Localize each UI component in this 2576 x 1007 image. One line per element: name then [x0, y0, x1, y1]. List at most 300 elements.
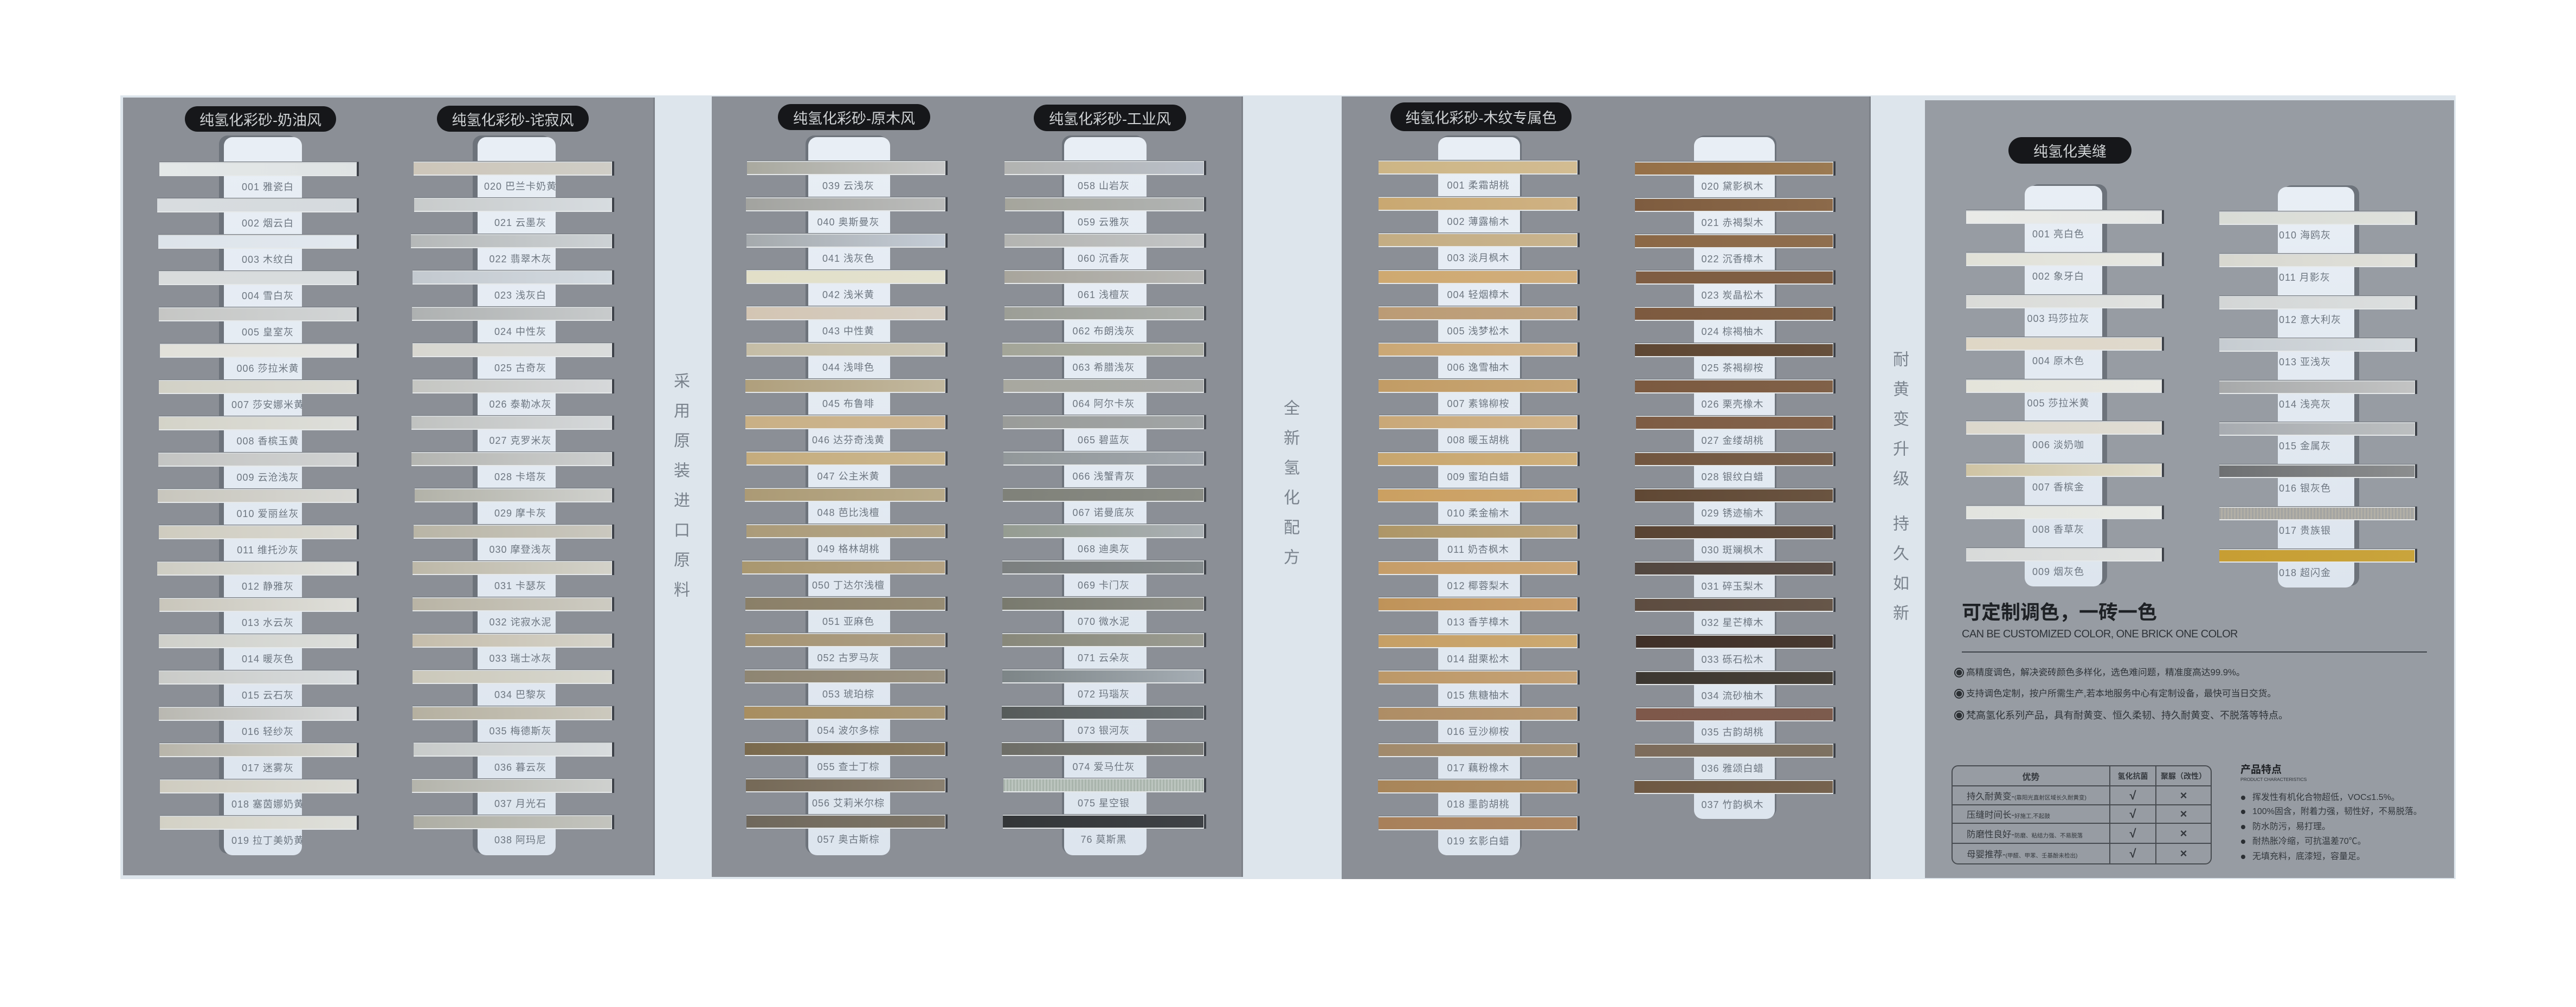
swatch 048 [742, 488, 948, 524]
swatch 067 [1002, 488, 1206, 524]
heading: 纯氢化美缝: 纯氢化美缝 [2033, 144, 2107, 160]
swatch 005 [159, 307, 359, 338]
swatch 076: 76 莫斯黑 [1080, 834, 1127, 845]
swatch 041: 041 浅灰色 [822, 253, 874, 264]
swatch 017 [2219, 507, 2417, 543]
swatch 022: 022 沉香樟木 [1701, 254, 1764, 264]
swatch 069 [1002, 560, 1206, 597]
swatch 019 [1378, 816, 1580, 853]
heading: 奶油风: 纯氢化彩砂-奶油风 [199, 112, 321, 128]
swatch 008: 008 香槟玉黄 [236, 436, 299, 447]
swatch 014: 014 暖灰色 [242, 654, 294, 664]
swatch 043: 043 中性黄 [822, 326, 874, 337]
heading: 诧寂风: 纯氢化彩砂-诧寂风 [452, 112, 574, 128]
swatch 018 [2219, 549, 2417, 585]
side text: 采用原装进口原料: 采用原装进口原料 [671, 372, 689, 611]
swatch 005: 005 浅梦松木 [1447, 326, 1510, 337]
swatch 057: 057 奥古斯棕 [817, 834, 880, 845]
swatch 068: 068 迪奥灰 [1078, 544, 1130, 554]
swatch 007: 007 香槟金 [2032, 482, 2084, 493]
swatch 004: 004 雪白灰 [242, 291, 294, 301]
swatch 015: 015 云石灰 [242, 690, 294, 701]
comparison table: 防磨性良好-防磨、粘结力强、不易脱落 [1967, 829, 2083, 839]
swatch 020: 020 黛影枫木 [1701, 181, 1764, 192]
swatch 009 [158, 452, 359, 483]
swatch 026 [1634, 379, 1836, 416]
swatch 014: 014 浅亮灰 [2279, 399, 2331, 410]
swatch 013: 013 水云灰 [242, 617, 294, 628]
swatch 046: 046 达芬奇浅黄 [812, 435, 885, 446]
swatch 035: 035 梅德斯灰 [489, 726, 552, 737]
swatch 035: 035 古韵胡桃 [1701, 727, 1764, 738]
swatch 003: 003 木纹白 [242, 254, 294, 265]
swatch 066: 066 浅蟹青灰 [1072, 471, 1135, 482]
comparison table: √ [2129, 788, 2136, 802]
swatch 012 [2219, 296, 2417, 332]
swatch 025: 025 古奇灰 [494, 363, 546, 373]
comparison table: 压缝时间长-好施工,不起鼓 [1967, 810, 2050, 820]
subheading: English: PRODUCT CHARACTERISTICS [2240, 777, 2307, 782]
swatch 038 [411, 815, 614, 851]
panel: 纯氢化美缝 [1925, 100, 2454, 878]
swatch 055 [742, 742, 948, 778]
feature 3: 防水防污，易打理。 [2252, 822, 2330, 831]
swatch 034: 034 巴黎灰 [494, 689, 546, 700]
swatch 038: 038 阿玛尼 [494, 835, 546, 845]
swatch 035 [1634, 707, 1836, 744]
swatch 024 [412, 306, 614, 337]
swatch 063: 063 希腊浅灰 [1072, 362, 1135, 373]
swatch 022: 022 翡翠木灰 [489, 254, 552, 264]
swatch 018: 018 超闪金 [2279, 567, 2331, 578]
swatch 007 [1966, 463, 2164, 500]
swatch 026 [413, 379, 614, 410]
swatch 070: 070 微水泥 [1078, 616, 1130, 627]
swatch 006 [1378, 343, 1580, 379]
swatch 004 [1378, 270, 1580, 306]
heading: 木纹专属色: 纯氢化彩砂-木纹专属色 [1405, 110, 1557, 126]
swatch 022 [411, 234, 614, 264]
swatch 059 [1002, 197, 1206, 234]
swatch 028: 028 银纹白蜡 [1701, 472, 1764, 482]
swatch 008: 008 香草灰 [2032, 524, 2084, 535]
swatch 032 [1634, 598, 1836, 634]
swatch 054: 054 波尔多棕 [817, 725, 880, 736]
swatch 040 [742, 197, 948, 234]
swatch 032: 032 星芒樟木 [1701, 617, 1764, 628]
swatch 017: 017 藕粉橡木 [1447, 763, 1510, 773]
swatch 030 [1634, 525, 1836, 561]
swatch 045: 045 布鲁啡 [822, 398, 874, 409]
swatch 006: 006 莎拉米黄 [236, 363, 299, 374]
comparison table: √ [2129, 826, 2136, 840]
swatch 011: 011 奶杏枫木 [1447, 544, 1509, 555]
swatch 012: 012 意大利灰 [2279, 314, 2341, 325]
swatch 019: 019 玄影白蜡 [1447, 836, 1510, 847]
swatch 039: 039 云浅灰 [822, 180, 874, 191]
swatch 018 [160, 779, 359, 810]
swatch 025 [413, 343, 614, 373]
swatch 024: 024 棕褐柚木 [1701, 326, 1764, 337]
icon: bullet 1 [1954, 668, 1964, 677]
swatch 008 [1966, 506, 2164, 542]
title: 可定制调色: 可定制调色，一砖一色 [1962, 601, 2157, 623]
swatch 007 [1378, 379, 1580, 415]
side text: 耐黄变升级 持久如新: 耐黄变升级 持久如新 [1890, 351, 1908, 634]
swatch 031 [411, 561, 614, 597]
swatch 045 [742, 379, 948, 415]
swatch 010 [1378, 488, 1580, 525]
swatch 037: 037 月光石 [494, 798, 546, 809]
swatch 006: 006 淡奶咖 [2032, 440, 2084, 450]
swatch 002 [1966, 253, 2164, 289]
swatch 015 [1378, 670, 1580, 707]
swatch 004: 004 轻烟樟木 [1447, 289, 1510, 300]
swatch 002 [1378, 197, 1580, 233]
swatch 029: 029 锈迹榆木 [1701, 508, 1764, 519]
swatch 012: 012 椰蓉梨木 [1447, 580, 1510, 591]
swatch 054 [742, 706, 948, 742]
swatch 074 [1002, 742, 1206, 778]
swatch 009 [1378, 452, 1580, 488]
swatch 037: 037 竹韵枫木 [1701, 799, 1764, 810]
swatch column: 美缝 001-009 [1966, 186, 2164, 586]
product characteristics [2240, 761, 2430, 867]
swatch 068 [1002, 524, 1206, 560]
swatch 015 [159, 670, 359, 701]
swatch 005: 005 皇室灰 [242, 327, 294, 338]
bullet text 1: 高精度调色，解决瓷砖颜色多样化，选色难问题，精准度高达99.9%。 [1966, 667, 2245, 677]
swatch 029 [1634, 488, 1836, 525]
swatch 046 [742, 415, 948, 451]
swatch 047 [742, 451, 948, 488]
swatch 033 [411, 634, 614, 670]
swatch 009: 009 云沧浅灰 [236, 472, 299, 483]
swatch 063 [1002, 343, 1206, 379]
comparison table: × [2180, 826, 2187, 840]
swatch 005 [1378, 306, 1580, 343]
swatch 070 [1002, 597, 1206, 633]
swatch 002: 002 烟云白 [242, 218, 294, 229]
swatch 016 [1378, 707, 1580, 743]
swatch 006 [1966, 421, 2164, 457]
swatch 025: 025 茶褐柳桉 [1701, 363, 1764, 373]
swatch 017 [159, 743, 359, 773]
comparison table: √ [2129, 847, 2136, 860]
panel: 木纹专属色 [1342, 96, 1871, 879]
heading: 奶油风 [185, 106, 336, 132]
swatch 052: 052 古罗马灰 [817, 653, 880, 663]
swatch 015: 015 金属灰 [2279, 441, 2331, 451]
swatch 006: 006 逸雪柚木 [1447, 362, 1510, 373]
swatch 062 [1002, 306, 1206, 343]
comparison table: 母婴推荐-(甲醛、甲苯、壬基酚未检出) [1967, 850, 2077, 860]
swatch 036 [1634, 744, 1836, 780]
swatch 040: 040 奥斯曼灰 [817, 217, 880, 228]
swatch 030: 030 斑斓枫木 [1701, 545, 1764, 556]
swatch 021: 021 赤褐梨木 [1701, 217, 1764, 228]
heading: 工业风 [1034, 105, 1186, 131]
swatch column: 原木风 [742, 137, 948, 855]
swatch 048: 048 芭比浅檀 [817, 507, 880, 518]
swatch 023 [413, 270, 614, 301]
swatch 062: 062 布朗浅灰 [1072, 326, 1135, 337]
swatch 030: 030 摩登浅灰 [489, 544, 552, 555]
swatch 012 [1378, 561, 1580, 597]
swatch 065 [1002, 415, 1206, 451]
swatch 066 [1002, 451, 1206, 488]
swatch 053: 053 琥珀棕 [822, 689, 874, 700]
swatch 034 [411, 670, 614, 706]
swatch 023 [1634, 270, 1836, 307]
swatch 050: 050 丁达尔浅檀 [812, 580, 885, 591]
swatch 047: 047 公主米黄 [817, 471, 880, 482]
swatch 075 [1002, 778, 1206, 815]
comparison table [1952, 765, 2214, 865]
swatch 013 [1378, 597, 1580, 634]
bullet text 2: 支持调色定制，按户所需生产,若本地服务中心有定制设备，最快可当日交货。 [1966, 688, 2276, 699]
swatch 009: 009 烟灰色 [2032, 566, 2084, 577]
subtitle: English: CAN BE CUSTOMIZED COLOR, ONE BRICK ONE COLOR [1962, 628, 2238, 640]
swatch 049: 049 格林胡桃 [817, 544, 880, 554]
swatch 018 [1378, 779, 1580, 816]
swatch 017: 017 迷雾灰 [242, 763, 294, 773]
swatch 007: 007 素锦柳桉 [1447, 398, 1510, 409]
heading: 产品特点: 产品特点 [2240, 764, 2282, 776]
swatch 073 [1002, 706, 1206, 742]
side text: 全新氢化配方: 全新氢化配方 [1281, 399, 1299, 578]
swatch 004: 004 原木色 [2032, 356, 2084, 366]
swatch 030 [411, 525, 614, 561]
swatch 060 [1002, 234, 1206, 270]
swatch 044 [742, 343, 948, 379]
swatch 075: 075 星空银 [1078, 798, 1130, 809]
swatch 074: 074 爱马仕灰 [1072, 761, 1135, 772]
swatch 033: 033 瑞士冰灰 [489, 653, 552, 664]
swatch 020 [1634, 162, 1836, 198]
swatch 071 [1002, 633, 1206, 669]
swatch 001 [159, 162, 359, 192]
swatch 041 [742, 234, 948, 270]
swatch 014 [2219, 380, 2417, 417]
swatch 003 [158, 234, 359, 265]
swatch 009 [1966, 548, 2164, 584]
swatch 058: 058 山岩灰 [1078, 180, 1130, 191]
swatch 043 [742, 306, 948, 343]
swatch 029: 029 摩卡灰 [494, 508, 546, 519]
swatch column: 美缝 010-018 [2219, 187, 2417, 588]
swatch 016 [159, 706, 359, 737]
swatch 051: 051 亚麻色 [822, 616, 874, 627]
swatch 027 [411, 415, 614, 446]
swatch 031 [1634, 561, 1836, 598]
text block: custom colour [1954, 599, 2429, 721]
swatch 027: 027 金缕胡桃 [1701, 435, 1764, 446]
swatch 017: 017 贵族银 [2279, 525, 2331, 536]
comparison table: 聚脲（改性） [2161, 772, 2206, 780]
swatch 055: 055 查士丁棕 [817, 761, 880, 772]
swatch 001: 001 雅瓷白 [242, 182, 294, 192]
swatch 024 [1634, 307, 1836, 343]
feature 4: 耐热胀冷缩，可抗温差70℃。 [2252, 837, 2366, 846]
swatch 064 [1002, 379, 1206, 415]
heading: 纯氢化美缝 [2008, 137, 2131, 164]
comparison table: × [2180, 847, 2187, 860]
swatch 014 [159, 634, 359, 664]
swatch 028 [411, 452, 614, 488]
swatch 023: 023 炭晶松木 [1701, 290, 1764, 301]
swatch 016 [2219, 464, 2417, 501]
swatch 051 [742, 597, 948, 633]
swatch 026: 026 泰勒冰灰 [489, 399, 552, 410]
swatch 027 [1634, 416, 1836, 452]
swatch 008 [159, 416, 359, 447]
swatch 061 [1002, 270, 1206, 306]
swatch 065: 065 碧蓝灰 [1078, 435, 1130, 446]
panel: 奶油风 and 诧寂风 [123, 98, 655, 875]
swatch 076 [1002, 815, 1206, 851]
swatch 006 [160, 343, 359, 374]
feature 5: 无填充料，底漆短，容量足。 [2252, 852, 2365, 861]
swatch 032: 032 诧寂水泥 [489, 617, 552, 628]
swatch 001: 001 亮白色 [2032, 229, 2084, 240]
comparison table: × [2180, 788, 2187, 802]
swatch 064: 064 阿尔卡灰 [1072, 398, 1135, 409]
swatch 026: 026 栗壳橡木 [1701, 399, 1764, 410]
swatch 012: 012 静雅灰 [242, 581, 294, 592]
comparison table: √ [2129, 807, 2136, 821]
swatch 060: 060 沉香灰 [1078, 253, 1130, 264]
swatch 031: 031 碎玉梨木 [1701, 581, 1764, 592]
swatch 024: 024 中性灰 [494, 326, 546, 337]
swatch 002 [157, 198, 359, 229]
swatch 058 [1002, 161, 1206, 197]
swatch column: 诧寂风 [411, 135, 614, 855]
swatch 002: 002 薄露榆木 [1447, 216, 1510, 227]
heading: 木纹专属色 [1390, 102, 1572, 131]
background card band [120, 95, 2456, 879]
swatch 021 [414, 197, 614, 228]
swatch 050 [742, 560, 948, 597]
swatch 034: 034 流砂柚木 [1701, 690, 1764, 701]
swatch 033: 033 砾石松木 [1701, 654, 1764, 665]
swatch 037 [411, 779, 614, 815]
swatch 004 [1966, 337, 2164, 373]
swatch 014: 014 甜栗松木 [1447, 654, 1510, 664]
swatch 007 [159, 379, 359, 410]
swatch 016: 016 轻纱灰 [242, 726, 294, 737]
swatch 021: 021 云墨灰 [494, 217, 546, 228]
swatch 008: 008 暖玉胡桃 [1447, 435, 1510, 446]
swatch 004 [159, 270, 359, 301]
bullet text 3: 梵高氢化系列产品，具有耐黄变、恒久柔韧、持久耐黄变、不脱落等特点。 [1966, 710, 2288, 721]
swatch 011: 011 月影灰 [2279, 272, 2330, 283]
heading: 工业风: 纯氢化彩砂-工业风 [1049, 111, 1171, 127]
comparison table: 氢化抗菌 [2117, 772, 2148, 780]
icon: bullet 2 [1954, 689, 1964, 699]
swatch 008 [1378, 415, 1580, 451]
swatch 042 [742, 270, 948, 306]
swatch 027: 027 克罗米灰 [489, 435, 552, 446]
swatch 003 [1966, 295, 2164, 331]
swatch 032 [411, 597, 614, 634]
swatch column: 工业风 [1002, 137, 1206, 855]
swatch 049 [742, 524, 948, 560]
swatch 033 [1634, 635, 1836, 671]
swatch 044: 044 浅啡色 [822, 362, 874, 373]
icon: bullet 3 [1954, 711, 1964, 720]
swatch 036: 036 暮云灰 [494, 762, 546, 773]
heading: 原木风: 纯氢化彩砂-原木风 [793, 111, 915, 127]
swatch 011 [1378, 525, 1580, 561]
swatch 005: 005 莎拉米黄 [2027, 398, 2090, 409]
comparison table: 持久耐黄变-(靠阳光直射区域长久耐黄变) [1967, 791, 2086, 801]
swatch 011 [2219, 254, 2417, 290]
swatch 010 [158, 488, 359, 519]
swatch 057 [742, 815, 948, 851]
swatch 069: 069 卡门灰 [1078, 580, 1130, 591]
swatch 003: 003 玛莎拉灰 [2027, 313, 2090, 324]
heading: 原木风 [778, 104, 930, 130]
swatch 020: 020 巴兰卡奶黄 [484, 181, 556, 192]
swatch 056 [742, 778, 948, 815]
swatch 015 [2219, 422, 2417, 459]
swatch 002: 002 象牙白 [2032, 271, 2084, 282]
swatch 010: 010 爱丽丝灰 [236, 508, 299, 519]
swatch 061: 061 浅檀灰 [1078, 289, 1130, 300]
swatch column: 木纹 020-037 [1634, 137, 1836, 819]
swatch 001: 001 柔霜胡桃 [1447, 180, 1510, 191]
swatch 011 [159, 525, 359, 556]
swatch 009: 009 蜜珀白蜡 [1447, 472, 1510, 482]
swatch 067: 067 诺曼底灰 [1072, 507, 1135, 518]
swatch 036: 036 雅颂白蜡 [1701, 763, 1764, 774]
swatch 013 [159, 597, 359, 628]
swatch 028: 028 卡塔灰 [494, 472, 546, 482]
swatch 071: 071 云朵灰 [1078, 653, 1130, 663]
swatch 016: 016 豆沙柳桉 [1447, 726, 1510, 737]
swatch 073: 073 银河灰 [1078, 725, 1130, 736]
swatch 020 [414, 161, 614, 192]
comparison table: × [2180, 807, 2187, 821]
swatch 017 [1378, 743, 1580, 779]
swatch 016: 016 银灰色 [2279, 483, 2331, 494]
swatch 042: 042 浅米黄 [822, 289, 874, 300]
swatch 013 [2219, 338, 2417, 375]
swatch 036 [411, 743, 614, 779]
feature 2: 100%固含，附着力强，韧性好，不易脱落。 [2252, 807, 2422, 816]
swatch 003: 003 淡月枫木 [1447, 253, 1510, 263]
swatch 025 [1634, 343, 1836, 379]
feature 1: 挥发性有机化合物超低，VOC≤1.5%。 [2252, 793, 2400, 802]
swatch 034 [1634, 671, 1836, 707]
swatch 056: 056 艾莉米尔棕 [812, 798, 885, 809]
swatch 028 [1634, 452, 1836, 488]
swatch 035 [411, 706, 614, 743]
swatch 018: 018 墨韵胡桃 [1447, 799, 1510, 810]
swatch 037 [1634, 780, 1836, 816]
swatch 010 [2219, 211, 2417, 248]
comparison table: 优势 [2022, 773, 2039, 782]
swatch 053 [742, 669, 948, 706]
swatch 001 [1966, 210, 2164, 247]
swatch 031: 031 卡瑟灰 [494, 580, 546, 591]
swatch 023: 023 浅灰白 [494, 290, 546, 301]
swatch 013: 013 亚浅灰 [2279, 357, 2331, 367]
panel: 原木风 and 工业风 [712, 96, 1243, 877]
swatch 005 [1966, 379, 2164, 416]
swatch 019 [160, 815, 359, 846]
